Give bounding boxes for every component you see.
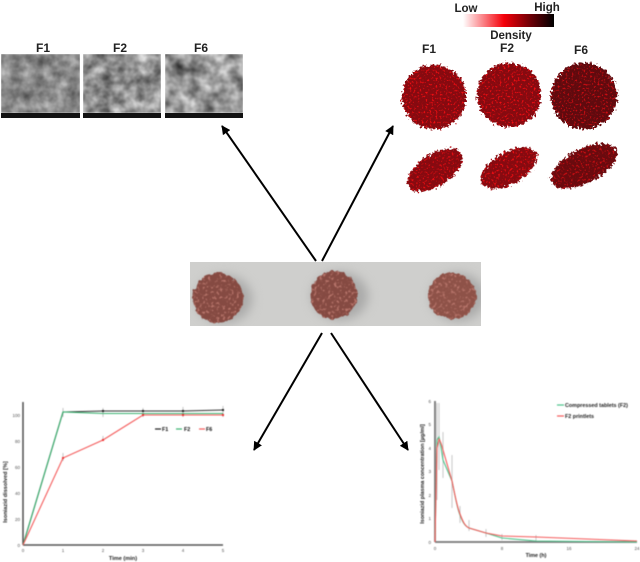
dissolution legend: F1 (162, 427, 168, 433)
dissolution y axis title: Isoniazid dissolved [%] (3, 461, 9, 523)
density legend: High (534, 2, 560, 14)
plasma legend: Compressed tablets (F2) (565, 403, 628, 409)
density legend (454, 2, 560, 42)
plasma x axis: 24 (634, 546, 640, 551)
plasma legend: F2 printlets (565, 414, 594, 420)
density label F2: F2 (500, 41, 514, 55)
series F2 (23, 412, 223, 545)
SEM label F6: F6 (194, 41, 208, 55)
SEM image F6 (165, 54, 243, 118)
density side view F1 (400, 140, 470, 200)
density top view F1 (402, 65, 466, 129)
printlet left (193, 273, 243, 323)
plasma x axis (434, 542, 640, 551)
SEM image F1 (1, 54, 80, 118)
dissolution y axis: 60 (15, 465, 20, 470)
dissolution x axis: 4 (182, 548, 185, 553)
dissolution legend: F6 (206, 427, 212, 433)
series F2 printlets (435, 439, 637, 542)
plasma y axis: 5 (428, 422, 431, 427)
SEM image F2 (83, 54, 161, 118)
dissolution y axis: 0 (17, 543, 20, 548)
plasma x axis: 0 (434, 546, 437, 551)
density label F1: F1 (422, 42, 436, 56)
plasma y axis: 4 (428, 446, 431, 451)
plasma y axis: 3 (428, 469, 431, 474)
dissolution y axis: 20 (15, 517, 20, 522)
panel: density maps (400, 2, 624, 200)
data markers (62, 409, 224, 459)
density side view F6 (544, 135, 624, 197)
density side view F2 (474, 139, 544, 197)
dissolution x axis: 2 (102, 548, 105, 553)
printlet right (428, 273, 476, 319)
plasma y axis: 0 (428, 540, 431, 545)
dissolution y axis (12, 402, 23, 548)
dissolution x axis (22, 545, 225, 553)
SEM label F1: F1 (36, 41, 50, 55)
plasma error bars (437, 403, 536, 541)
plasma x axis: 8 (501, 546, 504, 551)
plasma y axis: 2 (428, 493, 431, 498)
density legend: Low (454, 3, 478, 15)
series F6 (23, 415, 223, 545)
dissolution y axis: 80 (15, 439, 20, 444)
dissolution x axis: 5 (222, 548, 225, 553)
dissolution x axis: 3 (142, 548, 145, 553)
arrow: to density maps (322, 126, 393, 261)
plasma y axis: 6 (428, 399, 431, 404)
chart: isoniazid plasma concentration over time (420, 399, 640, 559)
arrow: to SEM (222, 126, 316, 261)
plasma x axis title: Time (h) (526, 553, 547, 559)
dissolution legend (155, 427, 212, 433)
plasma x axis: 16 (566, 546, 572, 551)
density top view F6 (551, 63, 617, 129)
dissolution legend: F2 (184, 427, 190, 433)
SEM label F2: F2 (113, 41, 127, 55)
arrow: to plasma chart (331, 333, 408, 450)
dissolution y axis: 100 (12, 413, 20, 418)
printlet middle (310, 271, 358, 319)
chart: isoniazid dissolved over time (3, 402, 225, 562)
plasma y axis (428, 399, 435, 545)
series F1 (23, 410, 223, 545)
plasma legend (557, 403, 628, 420)
dissolution x axis title: Time (min) (109, 556, 137, 562)
density label F6: F6 (574, 43, 588, 57)
dissolution y axis: 40 (15, 491, 20, 496)
density legend: Density (490, 30, 532, 42)
dissolution x axis: 1 (62, 548, 65, 553)
error bars (63, 406, 223, 461)
dissolution x axis: 0 (22, 548, 25, 553)
series compressed tablets F2 (435, 437, 637, 542)
plasma y axis: 1 (428, 516, 431, 521)
panel: SEM micrographs (1, 41, 243, 118)
arrow: to dissolution chart (254, 333, 322, 450)
density top view F2 (477, 63, 541, 127)
plasma y axis title: Isoniazid plasma concentration [µg/ml] (420, 424, 426, 524)
photo of printlets (190, 262, 485, 326)
